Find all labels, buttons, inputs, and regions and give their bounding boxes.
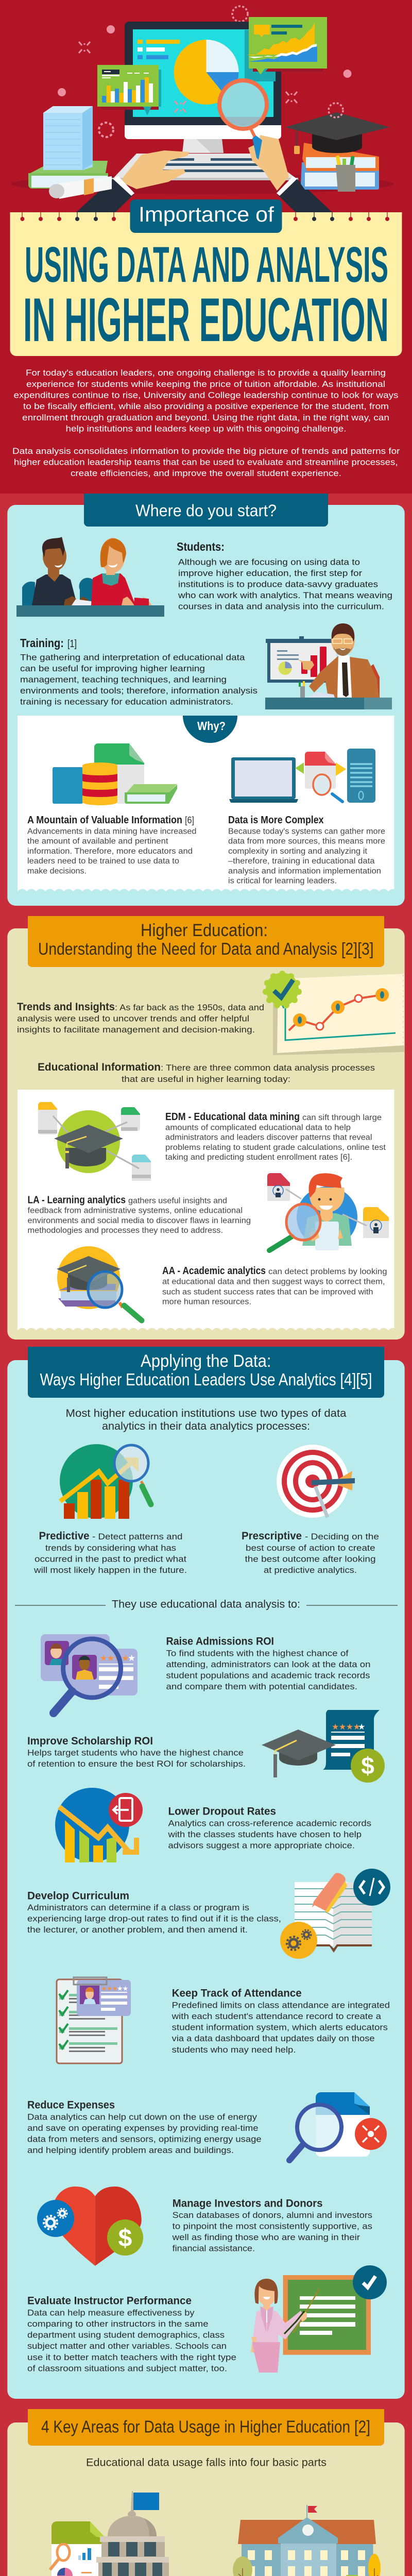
heading: applying the data [28, 1347, 384, 1398]
intro text: Data analysis consolidates information to provide the big picture of trends and patterns for [12, 446, 400, 456]
text: trends and insights: : As far back as the 1950s, data and [115, 1003, 264, 1012]
panel: higher education [7, 916, 405, 1340]
intro text [12, 368, 400, 478]
text: training: environments and tools; therefore, information analysis [20, 686, 258, 696]
text: EDM: can sift through large [302, 1113, 382, 1122]
text: mountain of valuable information: the amount of available and pertinent [27, 837, 168, 846]
icon: left hand and sleeve [76, 150, 189, 212]
text: lower dropout rates: Lower Dropout Rates [168, 1805, 276, 1818]
icon: cap with scholarship document: $ [361, 1752, 374, 1779]
text: reduce expenses: and save on operating expenses by providing real-time [27, 2123, 258, 2133]
intro text: higher education leadership teams that can be used to evaluate and streamline processes, [14, 457, 398, 467]
text: prescriptive: at predictive analytics. [264, 1565, 357, 1575]
icon: magnifying glass [219, 80, 267, 137]
text: prescriptive: the best outcome after looking [245, 1554, 376, 1564]
text: develop curriculum: Administrators can determine if a class or program is [27, 1903, 249, 1912]
text: raise admissions ROI: attending, administrators can look at the data on [166, 1659, 371, 1669]
text: raise admissions ROI [166, 1635, 371, 1691]
icon: student cards under magnifier: ★★★★ [99, 1653, 129, 1663]
title pill: Importance of [139, 202, 274, 226]
icon: governing building and report [50, 2491, 172, 2576]
icon: open book with pen and badges [280, 1869, 390, 1959]
icon: college building [233, 2505, 381, 2576]
icon: attendance clipboard: ★★ [117, 1985, 128, 1992]
panel: three analysis processes [18, 1090, 394, 1330]
text: raise admissions ROI: To find students with the highest chance of [166, 1649, 349, 1658]
main title [23, 236, 389, 354]
text: AA: AA - Academic analytics [162, 1265, 266, 1277]
text: evaluate instructor performance: subject matter and other variables. Schools can [27, 2341, 227, 2351]
text: develop curriculum: the lecturer, or another problem, and then amend it. [27, 1925, 248, 1935]
intro text: to be fiscally efficient, while also providing a positive experience for the student, from [23, 401, 389, 411]
text: students: who can work with analytics. That means weaving [178, 590, 392, 600]
text: AA [162, 1265, 387, 1307]
text: evaluate instructor performance: use it to better match teachers with the right type [27, 2352, 236, 2362]
text: educational information: : There are three common data analysis processes [161, 1063, 375, 1073]
text: predictive: Predictive [39, 1530, 90, 1542]
icon: energy document under magnifier [289, 2092, 387, 2160]
text: EDM: taking and predicting student enrollment rates [6]. [165, 1153, 352, 1162]
text: develop curriculum: Develop Curriculum [27, 1890, 129, 1902]
text: training: training is necessary for education administrators. [20, 697, 233, 707]
text: trends and insights [17, 1001, 264, 1035]
text: manage investors and donors: well as finding those who are waning in their [172, 2232, 360, 2242]
text: raise admissions ROI: and compare them with potential candidates. [166, 1682, 357, 1691]
title panel [10, 199, 402, 356]
text: evaluate instructor performance: Evaluate Instructor Performance [27, 2295, 192, 2307]
intro text: For today's education leaders, one ongoing challenge is to provide a quality learning [26, 368, 386, 378]
panel: where do you start [7, 494, 405, 906]
text: reduce expenses: data from meters and sensors, optimizing energy usage [27, 2134, 262, 2144]
text: training: can be useful for improving higher learning [20, 664, 205, 673]
text: lower dropout rates [167, 1805, 371, 1851]
text: evaluate instructor performance: comparing to other instructors in the same [27, 2319, 209, 2329]
intro text: experience for students while keeping the price of tuition affordable. As institutional [26, 379, 385, 389]
text: LA: environments and social media to discover flaws in learning [28, 1216, 251, 1225]
icon: checklist line chart [263, 971, 404, 1055]
text: raise admissions ROI: student populations and academic track records [166, 1670, 370, 1681]
text: LA: feedback from administrative systems, online educational [28, 1207, 243, 1215]
icon: heart with badges: $ [118, 2225, 132, 2252]
text: raise admissions ROI: Raise Admissions ROI [166, 1635, 274, 1648]
text: trends and insights: Trends and Insights [17, 1001, 115, 1013]
text: keep track of attendance [171, 1988, 390, 2055]
text: predictive: trends by considering what has [45, 1543, 176, 1553]
icon: attendance clipboard [57, 1977, 131, 2063]
text: improve scholarship ROI: of retention to ensure the best ROI for scholarships. [27, 1759, 246, 1769]
text: develop curriculum: experiencing large drop-out rates to find out if it is the class, [27, 1913, 281, 1924]
text: trends and insights: insights to facilitate management and decision-making. [17, 1025, 255, 1035]
text: mountain of valuable information: [6] [185, 815, 194, 825]
icon: two students at desk [16, 537, 164, 617]
text: EDM: EDM - Educational data mining [165, 1111, 300, 1123]
icon: green bar chart bubble [97, 65, 161, 115]
text: reduce expenses: and helping identify problem areas and buildings. [27, 2145, 234, 2155]
text: manage investors and donors: Scan databases of donors, alumni and investors [173, 2210, 372, 2220]
hero illustration [11, 6, 394, 212]
icon: green line chart bubble [245, 17, 327, 81]
intro text: expenditures continue to rise, University and College leadership continue to look for ways [13, 391, 398, 400]
text: AA: more human resources. [162, 1297, 251, 1307]
decorative pins [21, 212, 389, 221]
intro text: create efficiencies, and improve the overall student experience. [71, 468, 341, 478]
text: mountain of valuable information: leaders need to be trained to use data to [27, 857, 179, 866]
text: keep track of attendance: via a data dashboard that updates daily on those [172, 2033, 375, 2043]
icon: presenter with chart [265, 623, 392, 709]
icon: student cards under magnifier [41, 1634, 138, 1713]
panel: applying the data [7, 1347, 405, 2399]
icon: books with graduation cap [285, 103, 389, 192]
icon: laptop, file and server [229, 749, 375, 803]
text: data is more complex: Because today's systems can gather more [228, 827, 385, 836]
text: trends and insights: analysis were used to uncover trends and offer helpful [17, 1014, 249, 1023]
text: keep track of attendance: Predefined limits on class attendance are integrated [172, 2000, 390, 2010]
text: reduce expenses [27, 2099, 262, 2155]
text: students: Students: [177, 540, 225, 553]
text: educational information [38, 1061, 375, 1084]
text: evaluate instructor performance: department using student demographics, class [27, 2330, 225, 2340]
icon: EDM cap and files [38, 1102, 151, 1181]
icon: keyboard [112, 154, 298, 180]
text: data is more complex: –therefore, training in educational data [228, 857, 375, 866]
icon: files, database and book [53, 743, 177, 805]
icon: heart with badges [37, 2187, 143, 2266]
text: students: courses in data and analysis into the curriculum. [178, 602, 384, 611]
text: LA [28, 1194, 251, 1235]
text: evaluate instructor performance [27, 2295, 236, 2373]
text: EDM: amounts of complicated educational data to help [165, 1123, 351, 1132]
text: data is more complex: Data is More Complex [228, 815, 323, 826]
intro text: help institutions and leaders keep up with this ongoing challenge. [66, 423, 346, 434]
text: prescriptive [242, 1530, 379, 1575]
text: data is more complex: analysis and information implementation [228, 867, 381, 875]
icon: cap with scholarship document [262, 1710, 385, 1783]
text: predictive: will most likely happen in the future. [33, 1565, 187, 1575]
text: two types intro: analytics in their data analytics processes: [102, 1420, 310, 1432]
text: predictive: - Detect patterns and [92, 1532, 182, 1541]
icon: decorative dots and bursts [58, 6, 351, 137]
text: EDM: administrators and leaders discover patterns that reveal [165, 1133, 372, 1142]
text: improve scholarship ROI: Improve Scholarship ROI [27, 1735, 153, 1747]
text: EDM: problems relating to student grade calculations, online test [165, 1143, 386, 1152]
text: training: The gathering and interpretation of educational data [20, 652, 245, 663]
text: improve scholarship ROI: Helps target students who have the highest chance [27, 1748, 244, 1758]
icon: teacher at board [251, 2265, 387, 2372]
text: AA: at educational data and then suggest ways to correct them, [162, 1278, 385, 1286]
icon: target with arrow [277, 1445, 355, 1518]
intro text: enrollment through graduation and beyond. Using the right data, in the right way, can [22, 413, 389, 422]
text: mountain of valuable information: make decisions. [27, 867, 87, 875]
subheading: they use: They use educational data analysis to: [112, 1598, 300, 1611]
text: educational information: Educational Information [38, 1061, 161, 1073]
text: educational information: that are useful in higher learning today: [122, 1074, 290, 1084]
text: prescriptive: - Deciding on the [305, 1532, 379, 1541]
text: predictive [33, 1530, 187, 1575]
text: prescriptive: best course of action to create [246, 1543, 375, 1553]
icon: scroll [49, 176, 112, 199]
text: students: improve higher education, the first step for [178, 568, 362, 578]
text: mountain of valuable information: information. Therefore, more educators and [27, 847, 193, 856]
text: develop curriculum [27, 1890, 281, 1935]
heading: where do you start: Where do you start? [135, 501, 277, 520]
badge: why [183, 716, 237, 743]
badge: why: Why? [197, 719, 226, 733]
text: LA: methodologies and processes they need to address. [28, 1226, 223, 1235]
text: LA: gathers useful insights and [128, 1196, 227, 1206]
heading: where do you start [84, 494, 328, 527]
text: data is more complex: data from more sources, this means more [228, 837, 385, 846]
text: training: management, teaching techniques, and learning [20, 675, 227, 684]
text: data is more complex: is critical for learning leaders. [228, 877, 337, 885]
text: students: institutions is to produce data-savvy graduates [178, 579, 378, 589]
text: improve scholarship ROI [27, 1735, 246, 1769]
text: lower dropout rates: advisors suggest a more appropriate choice. [168, 1840, 355, 1851]
icon: attendance clipboard: ★★★ [101, 1985, 117, 1992]
text: keep track of attendance: student information system, which alerts educators [172, 2023, 388, 2032]
text: data is more complex: complexity in sorting and analyzing it [228, 847, 368, 856]
text: keep track of attendance: students who may need help. [172, 2045, 296, 2055]
text: students [177, 540, 392, 611]
text: two types intro: Most higher education institutions use two types of data [66, 1408, 347, 1419]
icon: cap with scholarship document: ★★★★ [332, 1723, 360, 1732]
text: two types intro [66, 1408, 347, 1432]
icon: dropout chart [55, 1788, 143, 1862]
icon: AA cap, books and magnifier [57, 1246, 142, 1320]
text: four basic parts: Educational data usage falls into four basic parts [86, 2456, 327, 2469]
icon: cap with scholarship document: ★ [358, 1723, 365, 1732]
heading: 4 key areas [28, 2409, 384, 2446]
text: students: Although we are focusing on using data to [178, 557, 360, 567]
text: prescriptive: Prescriptive [242, 1530, 302, 1542]
icon: predictive chart [60, 1444, 151, 1519]
text: lower dropout rates: with the classes students have chosen to help [167, 1829, 362, 1839]
text: EDM [165, 1111, 386, 1162]
text: evaluate instructor performance: Data can help measure effectiveness by [27, 2308, 195, 2317]
text: lower dropout rates: Analytics can cross-reference academic records [168, 1819, 371, 1828]
text: training: [1] [67, 638, 77, 650]
icon: LA analyst with magnifier [267, 1173, 389, 1250]
text: reduce expenses: Reduce Expenses [27, 2099, 115, 2111]
text: manage investors and donors [172, 2198, 372, 2253]
text: AA: such as student success rates that can be improved with [162, 1288, 373, 1296]
text: mountain of valuable information: Advancements in data mining have increased [27, 827, 197, 836]
icon: right hand and sleeve [248, 135, 332, 212]
text: predictive: occurred in the past to predict what [35, 1554, 186, 1564]
icon: student cards under magnifier: ★ [128, 1653, 135, 1663]
heading: higher education: Higher Education: [141, 921, 268, 940]
panel: 4 key areas [7, 2409, 405, 2576]
text: manage investors and donors: financial assistance. [173, 2243, 255, 2253]
text: manage investors and donors: Manage Investors and Donors [173, 2198, 322, 2209]
icon: monitor with pie chart [125, 22, 281, 153]
text: evaluate instructor performance: of classroom situations and subject matter, too. [27, 2364, 227, 2373]
text: LA: LA - Learning analytics [28, 1194, 126, 1206]
text: AA: can detect problems by looking [268, 1267, 387, 1276]
heading: applying the data: Applying the Data: [141, 1351, 271, 1371]
icon: books with document tower [28, 106, 108, 189]
text: manage investors and donors: to pinpoint the most consistently supportive, as [173, 2222, 372, 2231]
text: mountain of valuable information: A Mountain of Valuable Information [27, 815, 182, 826]
heading: higher education [28, 916, 384, 967]
text: mountain of valuable information [27, 815, 197, 875]
text: reduce expenses: Data analytics can help cut down on the use of energy [27, 2112, 258, 2122]
text: training [20, 636, 258, 707]
title pill [130, 199, 282, 233]
panel: why [18, 716, 394, 891]
text: data is more complex [228, 815, 385, 885]
text: keep track of attendance: Keep Track of Attendance [172, 1988, 302, 1999]
text: keep track of attendance: with each student's attendance record to create a [171, 2011, 382, 2021]
text: training: Training: [20, 636, 64, 650]
